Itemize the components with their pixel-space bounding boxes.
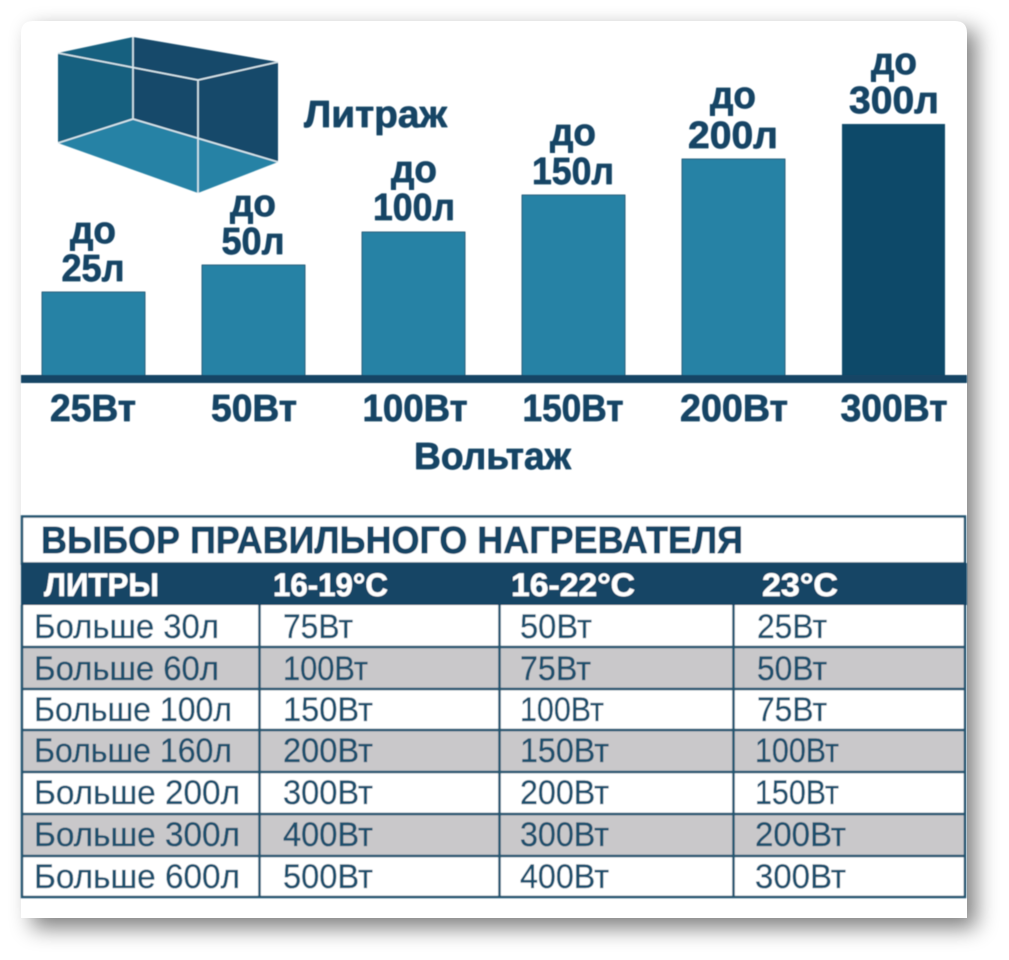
bar label: до 300л xyxy=(849,41,939,122)
row: Больше 600л: 300Вт xyxy=(755,858,846,896)
row: Больше 300л: 400Вт xyxy=(283,816,373,854)
bar: 150 W xyxy=(522,195,625,376)
table rows background xyxy=(22,605,965,897)
bar label: до 300л: до xyxy=(871,41,917,83)
row: Больше 300л: 300Вт xyxy=(520,816,609,854)
row: Больше 160л: Больше 160л xyxy=(34,732,232,770)
row: Больше 60л: 75Вт xyxy=(520,650,591,688)
bar label: до 150л: 150л xyxy=(532,151,614,193)
axis labels: wattage: 50Вт xyxy=(211,388,297,430)
axis labels: wattage: 200Вт xyxy=(680,388,788,430)
bar label: до 50л: до xyxy=(230,183,276,225)
bar label: до 100л xyxy=(373,149,455,229)
table header row: 23°C xyxy=(762,567,838,603)
row: Больше 300л xyxy=(34,816,846,854)
row: Больше 600л: 500Вт xyxy=(283,858,373,896)
bar label: до 50л xyxy=(222,183,284,263)
axis labels: wattage: 300Вт xyxy=(840,388,948,430)
bar: 50 W xyxy=(202,265,305,376)
bar label: до 25л: 25л xyxy=(62,248,124,290)
row: Больше 30л: 25Вт xyxy=(757,608,827,646)
bar label: до 300л: 300л xyxy=(849,80,939,122)
bar label: до 50л: 50л xyxy=(222,221,284,263)
table header row: 16-22°C xyxy=(511,567,635,603)
row: Больше 100л: 100Вт xyxy=(520,691,604,729)
row: Больше 200л: 200Вт xyxy=(520,774,609,812)
bar label: до 200л xyxy=(688,75,778,157)
row: Больше 60л xyxy=(34,650,827,688)
row: Больше 200л: 150Вт xyxy=(755,774,839,812)
bar label: до 150л: до xyxy=(550,112,596,154)
bar label: до 150л xyxy=(532,112,614,193)
row: Больше 100л: 150Вт xyxy=(283,691,373,729)
row: Больше 600л: 400Вт xyxy=(520,858,609,896)
row: Больше 300л: 200Вт xyxy=(755,816,846,854)
row: Больше 600л xyxy=(34,858,846,896)
table header row: 16-19°C xyxy=(273,567,388,603)
row: Больше 160л xyxy=(34,732,839,770)
bar: 25 W xyxy=(42,292,145,376)
row: Больше 300л: Больше 300л xyxy=(34,816,240,854)
row: Больше 160л: 200Вт xyxy=(283,732,373,770)
row: Больше 30л: 50Вт xyxy=(520,608,592,646)
bar: 200 W xyxy=(682,159,785,376)
row: Больше 100л xyxy=(34,691,827,729)
row: Больше 30л xyxy=(34,608,827,646)
bar label: до 200л: до xyxy=(710,75,756,117)
bar: 300 W xyxy=(842,124,945,376)
bar label: до 100л: 100л xyxy=(373,187,455,229)
table title: ВЫБОР ПРАВИЛЬНОГО НАГРЕВАТЕЛЯ xyxy=(41,520,743,562)
row: Больше 200л xyxy=(34,774,839,812)
row: Больше 100л: Больше 100л xyxy=(34,691,232,729)
bar chart: litres by wattage xyxy=(21,41,967,430)
bar label: до 25л xyxy=(62,210,124,290)
row: Больше 30л: Больше 30л xyxy=(34,608,219,646)
bar: 100 W xyxy=(362,232,465,376)
row: Больше 60л: 100Вт xyxy=(283,650,368,688)
axis title: Вольтаж: Вольтаж xyxy=(414,436,572,478)
row: Больше 200л: Больше 200л xyxy=(34,774,240,812)
axis labels: wattage: 150Вт xyxy=(522,388,624,430)
bar label: до 100л: до xyxy=(391,149,437,191)
axis labels: wattage xyxy=(50,388,948,430)
table header row xyxy=(21,563,967,605)
row: Больше 100л: 75Вт xyxy=(757,691,827,729)
row: Больше 60л: 50Вт xyxy=(757,650,827,688)
heading: Литраж: Литраж xyxy=(304,94,448,136)
row: Больше 160л: 100Вт xyxy=(755,732,839,770)
row: Больше 60л: Больше 60л xyxy=(34,650,219,688)
row: Больше 160л: 150Вт xyxy=(520,732,609,770)
row: Больше 30л: 75Вт xyxy=(283,608,353,646)
bar label: до 25л: до xyxy=(70,210,116,252)
row: Больше 600л: Больше 600л xyxy=(34,858,240,896)
axis labels: wattage: 25Вт xyxy=(50,388,136,430)
axis labels: wattage: 100Вт xyxy=(362,388,468,430)
row: Больше 200л: 300Вт xyxy=(283,774,373,812)
bar label: до 200л: 200л xyxy=(688,115,778,157)
axis line xyxy=(21,375,967,383)
icon: aquarium tank xyxy=(58,37,278,193)
table: heater selection xyxy=(21,516,967,897)
table header row: ЛИТРЫ xyxy=(44,567,159,603)
